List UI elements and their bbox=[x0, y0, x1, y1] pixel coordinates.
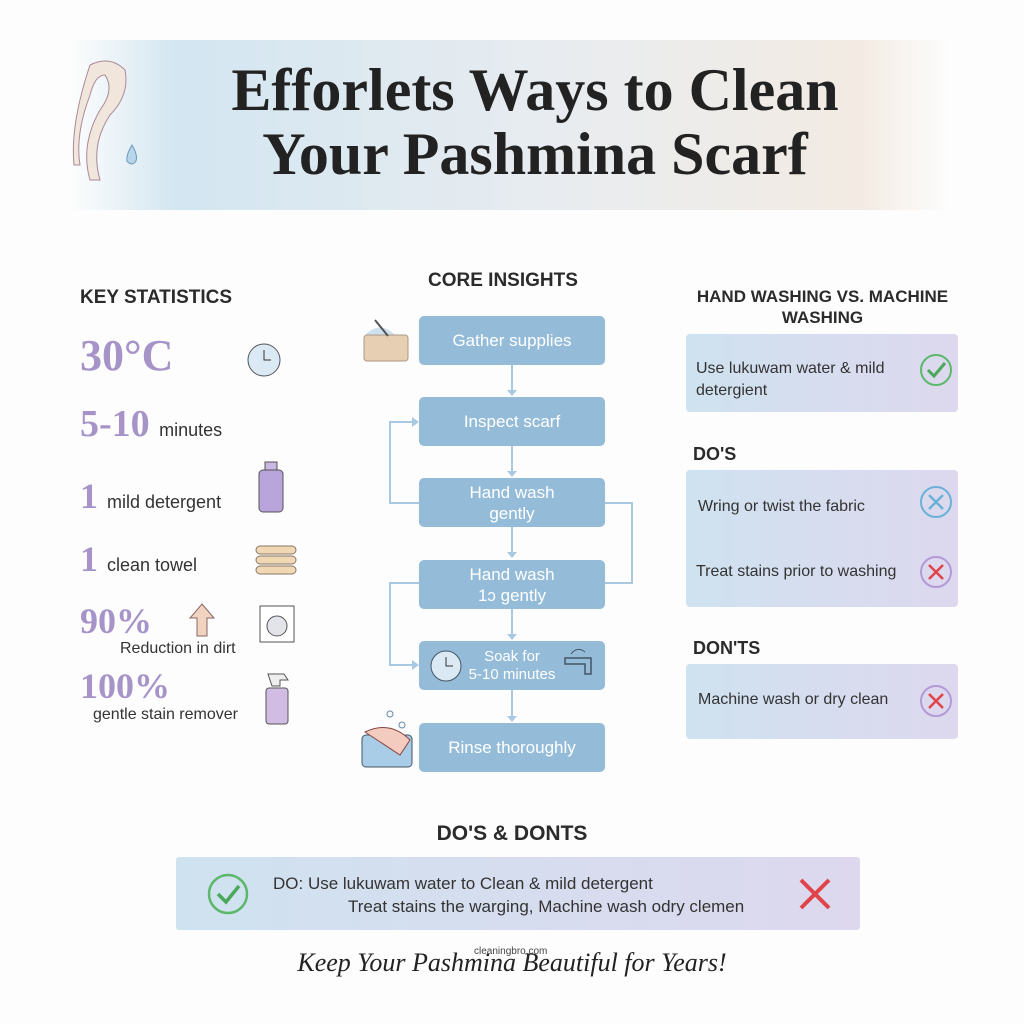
stat minutes: 5-10 minutes bbox=[80, 403, 222, 445]
bottom banner: Treat stains the warging, Machine wash odry clemen bbox=[348, 897, 744, 916]
panel: comparison: Use lukuwam water & mild detergient bbox=[696, 360, 884, 399]
step: inspect: Inspect scarf bbox=[464, 412, 560, 431]
title banner bbox=[70, 40, 950, 210]
icon: washing machine bbox=[260, 606, 294, 642]
icon: arrow up bbox=[189, 603, 215, 636]
icon: x bbox=[800, 878, 830, 910]
step: hand wash: gently bbox=[489, 504, 535, 522]
label reduction: Reduction in dirt bbox=[120, 640, 236, 657]
step: soak bbox=[419, 641, 605, 690]
panel: dos: Treat stains prior to washing bbox=[696, 563, 896, 580]
heading: dos: DO'S bbox=[693, 444, 736, 464]
icon: bottle bbox=[258, 462, 284, 512]
step: rinse: Rinse thoroughly bbox=[448, 738, 576, 757]
step: inspect bbox=[419, 397, 605, 446]
step: hand wash 2: Hand wash bbox=[469, 564, 555, 584]
flowchart bbox=[362, 319, 633, 768]
icon: scarf bbox=[72, 60, 137, 180]
panel: key statistics bbox=[80, 331, 296, 724]
icon: x red bbox=[920, 556, 952, 588]
heading: key statistics: KEY STATISTICS bbox=[80, 287, 232, 308]
watermark: cleaningbro.com bbox=[474, 946, 547, 957]
panel: donts: Machine wash or dry clean bbox=[698, 691, 888, 708]
label stain remover: gentle stain remover bbox=[93, 706, 238, 723]
step: soak: 5-10 minutes bbox=[469, 666, 555, 682]
title text: Efforlets Ways to Clean bbox=[231, 57, 839, 123]
step: gather: Gather supplies bbox=[452, 331, 572, 350]
step: hand wash 2: 1ↄ gently bbox=[478, 586, 546, 604]
bottom banner: DO: Use lukuwam water to Clean & mild detergent bbox=[273, 874, 653, 893]
heading: donts: DON'TS bbox=[693, 638, 760, 658]
step: rinse bbox=[419, 723, 605, 772]
icon: towels bbox=[256, 546, 296, 574]
stat detergent: 1 mild detergent bbox=[80, 476, 221, 516]
step: gather bbox=[419, 316, 605, 365]
stat 100%: 100% bbox=[80, 666, 170, 706]
heading: core insights: CORE INSIGHTS bbox=[428, 270, 578, 291]
icon: spray bbox=[266, 674, 289, 724]
step: hand wash bbox=[419, 478, 605, 527]
stat towel: 1 clean towel bbox=[80, 539, 197, 579]
stat 30C: 30°C bbox=[80, 331, 173, 380]
panel: donts bbox=[686, 664, 958, 739]
step: soak: Soak for bbox=[484, 648, 540, 664]
icon: check bbox=[920, 354, 952, 386]
icon: x blue bbox=[920, 486, 952, 518]
title text: Your Pashmina Scarf bbox=[262, 121, 808, 187]
icon: basin hands bbox=[362, 711, 412, 767]
stat 90%: 90% bbox=[80, 601, 152, 641]
title text bbox=[231, 57, 839, 187]
step: hand wash: Hand wash bbox=[469, 482, 555, 502]
heading: hand vs machine: HAND WASHING VS. MACHINE WASHING bbox=[697, 287, 948, 327]
heading: dos and donts: DO'S & DONTS bbox=[437, 822, 587, 845]
icon: check bbox=[208, 874, 248, 914]
icon: basket bbox=[364, 320, 408, 361]
icon: clock bbox=[248, 344, 280, 376]
panel: dos: Wring or twist the fabric bbox=[698, 498, 865, 515]
panel: dos bbox=[686, 470, 958, 607]
icon: x bbox=[920, 685, 952, 717]
step: hand wash 2 bbox=[419, 560, 605, 609]
footer tagline: Keep Your Pashmina Beautiful for Years! bbox=[297, 948, 727, 977]
bottom banner bbox=[176, 857, 860, 930]
panel: comparison bbox=[686, 334, 958, 412]
